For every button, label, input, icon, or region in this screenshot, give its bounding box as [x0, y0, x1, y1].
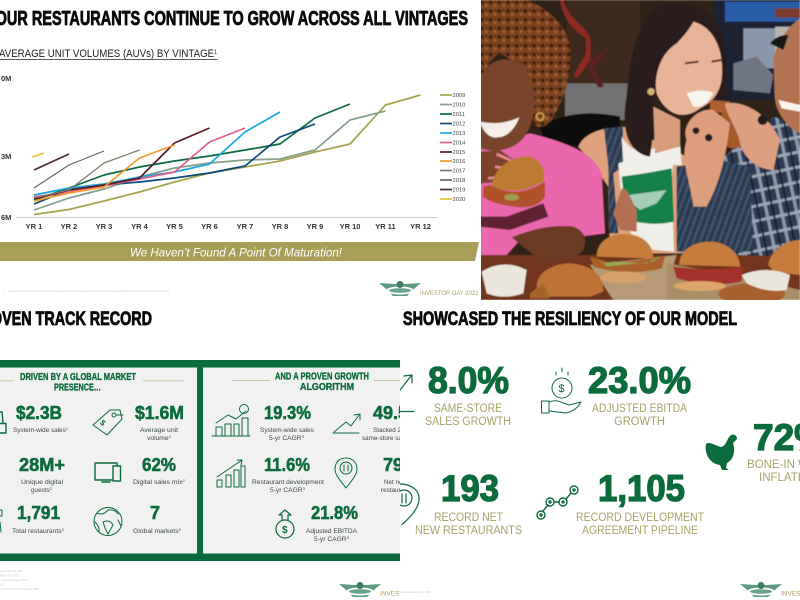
stat: development pipeline: AGREEMENT PIPELINE [582, 525, 698, 537]
logo: wings [339, 582, 381, 597]
stat: adjusted EBITDA: 21.8% [311, 503, 358, 523]
icon: price tag: $ [98, 418, 108, 428]
icon: trend arrow [333, 414, 360, 433]
right man [677, 117, 800, 257]
green frame [0, 360, 400, 561]
stat: digital sales mix: 2 [183, 478, 186, 483]
legend: 2019 [452, 188, 465, 194]
stat: total restaurants: 2 [62, 527, 65, 532]
x axis labels [26, 222, 431, 231]
left burger [480, 150, 517, 183]
y axis labels: 6M [1, 213, 11, 222]
stat: global markets: 7 [150, 503, 160, 523]
left woman hand [512, 226, 585, 262]
stat: adjusted EBITDA: Adjusted EBITDA [306, 528, 358, 535]
stat: average unit volume [135, 403, 184, 442]
stat: system-wide CAGR: System-wide sales [260, 427, 314, 434]
legend: 2009 [452, 93, 465, 99]
stat: average unit volume: volume [147, 435, 167, 442]
mid woman face [656, 22, 722, 115]
icon: money bag: $ [282, 525, 288, 536]
stat: restaurant development [252, 455, 324, 494]
stat: stacked same-store sales: same-store sales [362, 435, 410, 442]
x axis labels: YR 4 [131, 222, 149, 231]
x axis labels: YR 8 [272, 222, 288, 231]
stat: total restaurants: Total restaurants [12, 528, 59, 535]
stat: net new restaurants [381, 455, 419, 494]
stat: average unit volume: $1.6M [135, 403, 184, 423]
stat: adjusted EBITDA growth: GROWTH [614, 416, 665, 428]
stat: average unit volume: 2 [169, 434, 172, 439]
stat: global markets [133, 503, 182, 535]
stat: digital guests: 28M+ [19, 455, 65, 475]
stat: adjusted EBITDA [306, 503, 358, 543]
stat: adjusted EBITDA growth: ADJUSTED EBITDA [592, 403, 687, 415]
stat: stacked same-store sales [362, 403, 424, 442]
panel: proven track record slide [0, 308, 444, 598]
panel heading left: DRIVEN BY A GLOBAL MARKET [20, 372, 136, 383]
x axis labels: YR 7 [237, 222, 253, 231]
y axis labels: 0M [1, 74, 11, 83]
icon: restaurant [0, 510, 2, 532]
stat: system-wide CAGR [260, 403, 314, 442]
stat: digital guests [19, 455, 65, 494]
stat: system-wide CAGR: 5-yr CAGR [269, 435, 300, 442]
x axis labels: YR 5 [166, 222, 183, 231]
x axis labels: YR 3 [96, 222, 112, 231]
legend: 2013 [452, 131, 465, 137]
logo: wings [740, 582, 782, 597]
x axis labels: YR 11 [375, 222, 396, 231]
icon: price tag [93, 410, 123, 435]
panel: global market presence [0, 368, 197, 554]
stat: global markets: 2 [179, 527, 182, 532]
stat: digital sales mix: 62% [142, 455, 176, 475]
stat: record net new restaurants [415, 468, 522, 537]
stat: stacked same-store sales: 49.5% [373, 403, 424, 423]
stat: net new restaurants: restaurants [381, 487, 412, 494]
stat: record net new restaurants: NEW RESTAURANTS [415, 525, 522, 537]
chart subtitle: 1 [214, 50, 218, 56]
x axis labels: YR 2 [61, 222, 77, 231]
stat: system-wide sales: 1 [66, 426, 69, 431]
mid woman body [578, 127, 687, 253]
panel: AUV chart slide [0, 8, 479, 297]
front burgers [597, 234, 653, 258]
stat: digital sales mix [133, 455, 186, 486]
legend: 2011 [452, 112, 465, 118]
legend: 2012 [452, 122, 465, 128]
stat: digital sales mix: Digital sales mix [133, 479, 178, 486]
stat: system-wide CAGR: 3 [302, 434, 305, 439]
table [480, 255, 800, 300]
stat: global markets: Global markets [133, 528, 175, 535]
stat: record net new restaurants: RECORD NET [434, 512, 503, 524]
footnote: ended December 26, 2021 [400, 590, 431, 594]
stat: digital guests: guests [31, 487, 50, 494]
icon: store [0, 412, 6, 433]
stat: system-wide sales: System-wide sales [13, 427, 66, 434]
stat: adjusted EBITDA growth [588, 360, 691, 428]
left woman hair [480, 0, 570, 127]
footnotes [0, 569, 40, 591]
icon: chicken [706, 435, 737, 470]
stat: restaurant development: 3 [303, 486, 306, 491]
legend: 2016 [452, 159, 465, 165]
left woman shirt [480, 133, 605, 255]
stat: net new restaurants: Net new [384, 479, 408, 486]
stat: adjusted EBITDA: 5-yr CAGR [314, 536, 345, 543]
stat: net new restaurants: 79% [383, 455, 419, 475]
legend: 2015 [452, 150, 465, 156]
stat: record net new restaurants: 193 [441, 468, 499, 509]
icon: devices [95, 463, 120, 482]
icon: rising bars [217, 460, 245, 487]
stat: adjusted EBITDA growth: 23.0% [588, 360, 691, 401]
mid woman hair [625, 3, 728, 157]
stat: same-store sales: SALES GROWTH [425, 416, 511, 428]
photo: people eating chicken sandwiches [481, 0, 800, 300]
stat: restaurant development: Restaurant development [252, 479, 324, 486]
x axis labels: YR 10 [340, 222, 360, 231]
icon: money bag [276, 510, 294, 538]
x axis labels: YR 6 [201, 222, 218, 231]
icon: pipeline nodes [537, 486, 578, 519]
stat: total restaurants: 1,791 [17, 503, 60, 523]
icon: hand with coin: $ [558, 383, 565, 395]
icon: map pin [335, 458, 357, 488]
logo: wings [379, 281, 421, 296]
stat: same-store sales [425, 360, 511, 428]
mid woman neck [653, 107, 680, 153]
panel heading right: AND A PROVEN GROWTH [275, 372, 369, 382]
legend: 2014 [452, 140, 466, 146]
legend: 2018 [452, 178, 465, 184]
stat: development pipeline: 1,105 [598, 468, 685, 509]
icon: hand with coin [542, 368, 581, 413]
stat: development pipeline: RECORD DEVELOPMENT [576, 512, 704, 524]
y axis labels [1, 74, 11, 222]
stat: digital guests: Unique digital [21, 479, 63, 486]
x axis labels: YR 12 [410, 222, 431, 231]
icon: globe [94, 508, 122, 536]
stat: stacked same-store sales: Stacked 2-yr [373, 427, 408, 434]
stat: system-wide sales [13, 403, 69, 434]
investor day label: INVESTOR DAY 2022 [380, 590, 444, 598]
panel heading right: ALGORITHM [300, 382, 354, 393]
panel heading left [0, 372, 184, 394]
line chart: AUVs by vintage [1, 74, 466, 231]
stat: system-wide sales: $2.3B [16, 403, 62, 423]
icon: bars with coin [212, 404, 250, 436]
stat: digital guests: 2 [50, 486, 53, 491]
stat: total restaurants [12, 503, 65, 535]
chart lines [32, 95, 420, 214]
stat: bone-in wing inflation [747, 417, 800, 484]
legend: 2020 [452, 197, 465, 203]
banner: point of maturation: We Haven’t Found A Point Of Maturation! [130, 246, 343, 260]
footnote: 1. Average unit volumes shown for each 52-week period since restaurant opening for that respective year. Results through December 26, 2021. [3, 289, 170, 293]
stat: average unit volume: Average unit [140, 427, 178, 434]
stat: system-wide CAGR: 19.3% [264, 403, 311, 423]
chart subtitle: AVERAGE UNIT VOLUMES (AUVs) BY VINTAGE [0, 48, 243, 60]
stat: same-store sales: SAME-STORE [434, 403, 502, 415]
stat: restaurant development: 5-yr CAGR [270, 487, 301, 494]
banner: point of maturation [0, 242, 479, 261]
stat: restaurant development: 11.6% [264, 455, 310, 475]
stat: development pipeline [576, 468, 704, 537]
x axis labels: YR 9 [307, 222, 323, 231]
panel heading left: PRESENCE… [54, 382, 101, 394]
stat: adjusted EBITDA: 3 [347, 535, 350, 540]
panel: proven growth algorithm [203, 368, 424, 554]
panel heading right [232, 372, 400, 393]
panel: resiliency slide [400, 308, 800, 598]
cup [618, 157, 674, 252]
y axis labels: 3M [1, 152, 11, 161]
left woman face [480, 60, 534, 150]
x axis labels: YR 1 [26, 222, 42, 231]
icon: location pin [396, 484, 419, 524]
legend: 2017 [452, 168, 465, 174]
legend: 2010 [452, 102, 465, 108]
burger held by mid woman and hands [717, 108, 750, 148]
stat: same-store sales: 8.0% [428, 360, 509, 401]
icon: trend arrow [400, 375, 414, 412]
legend [440, 93, 466, 203]
